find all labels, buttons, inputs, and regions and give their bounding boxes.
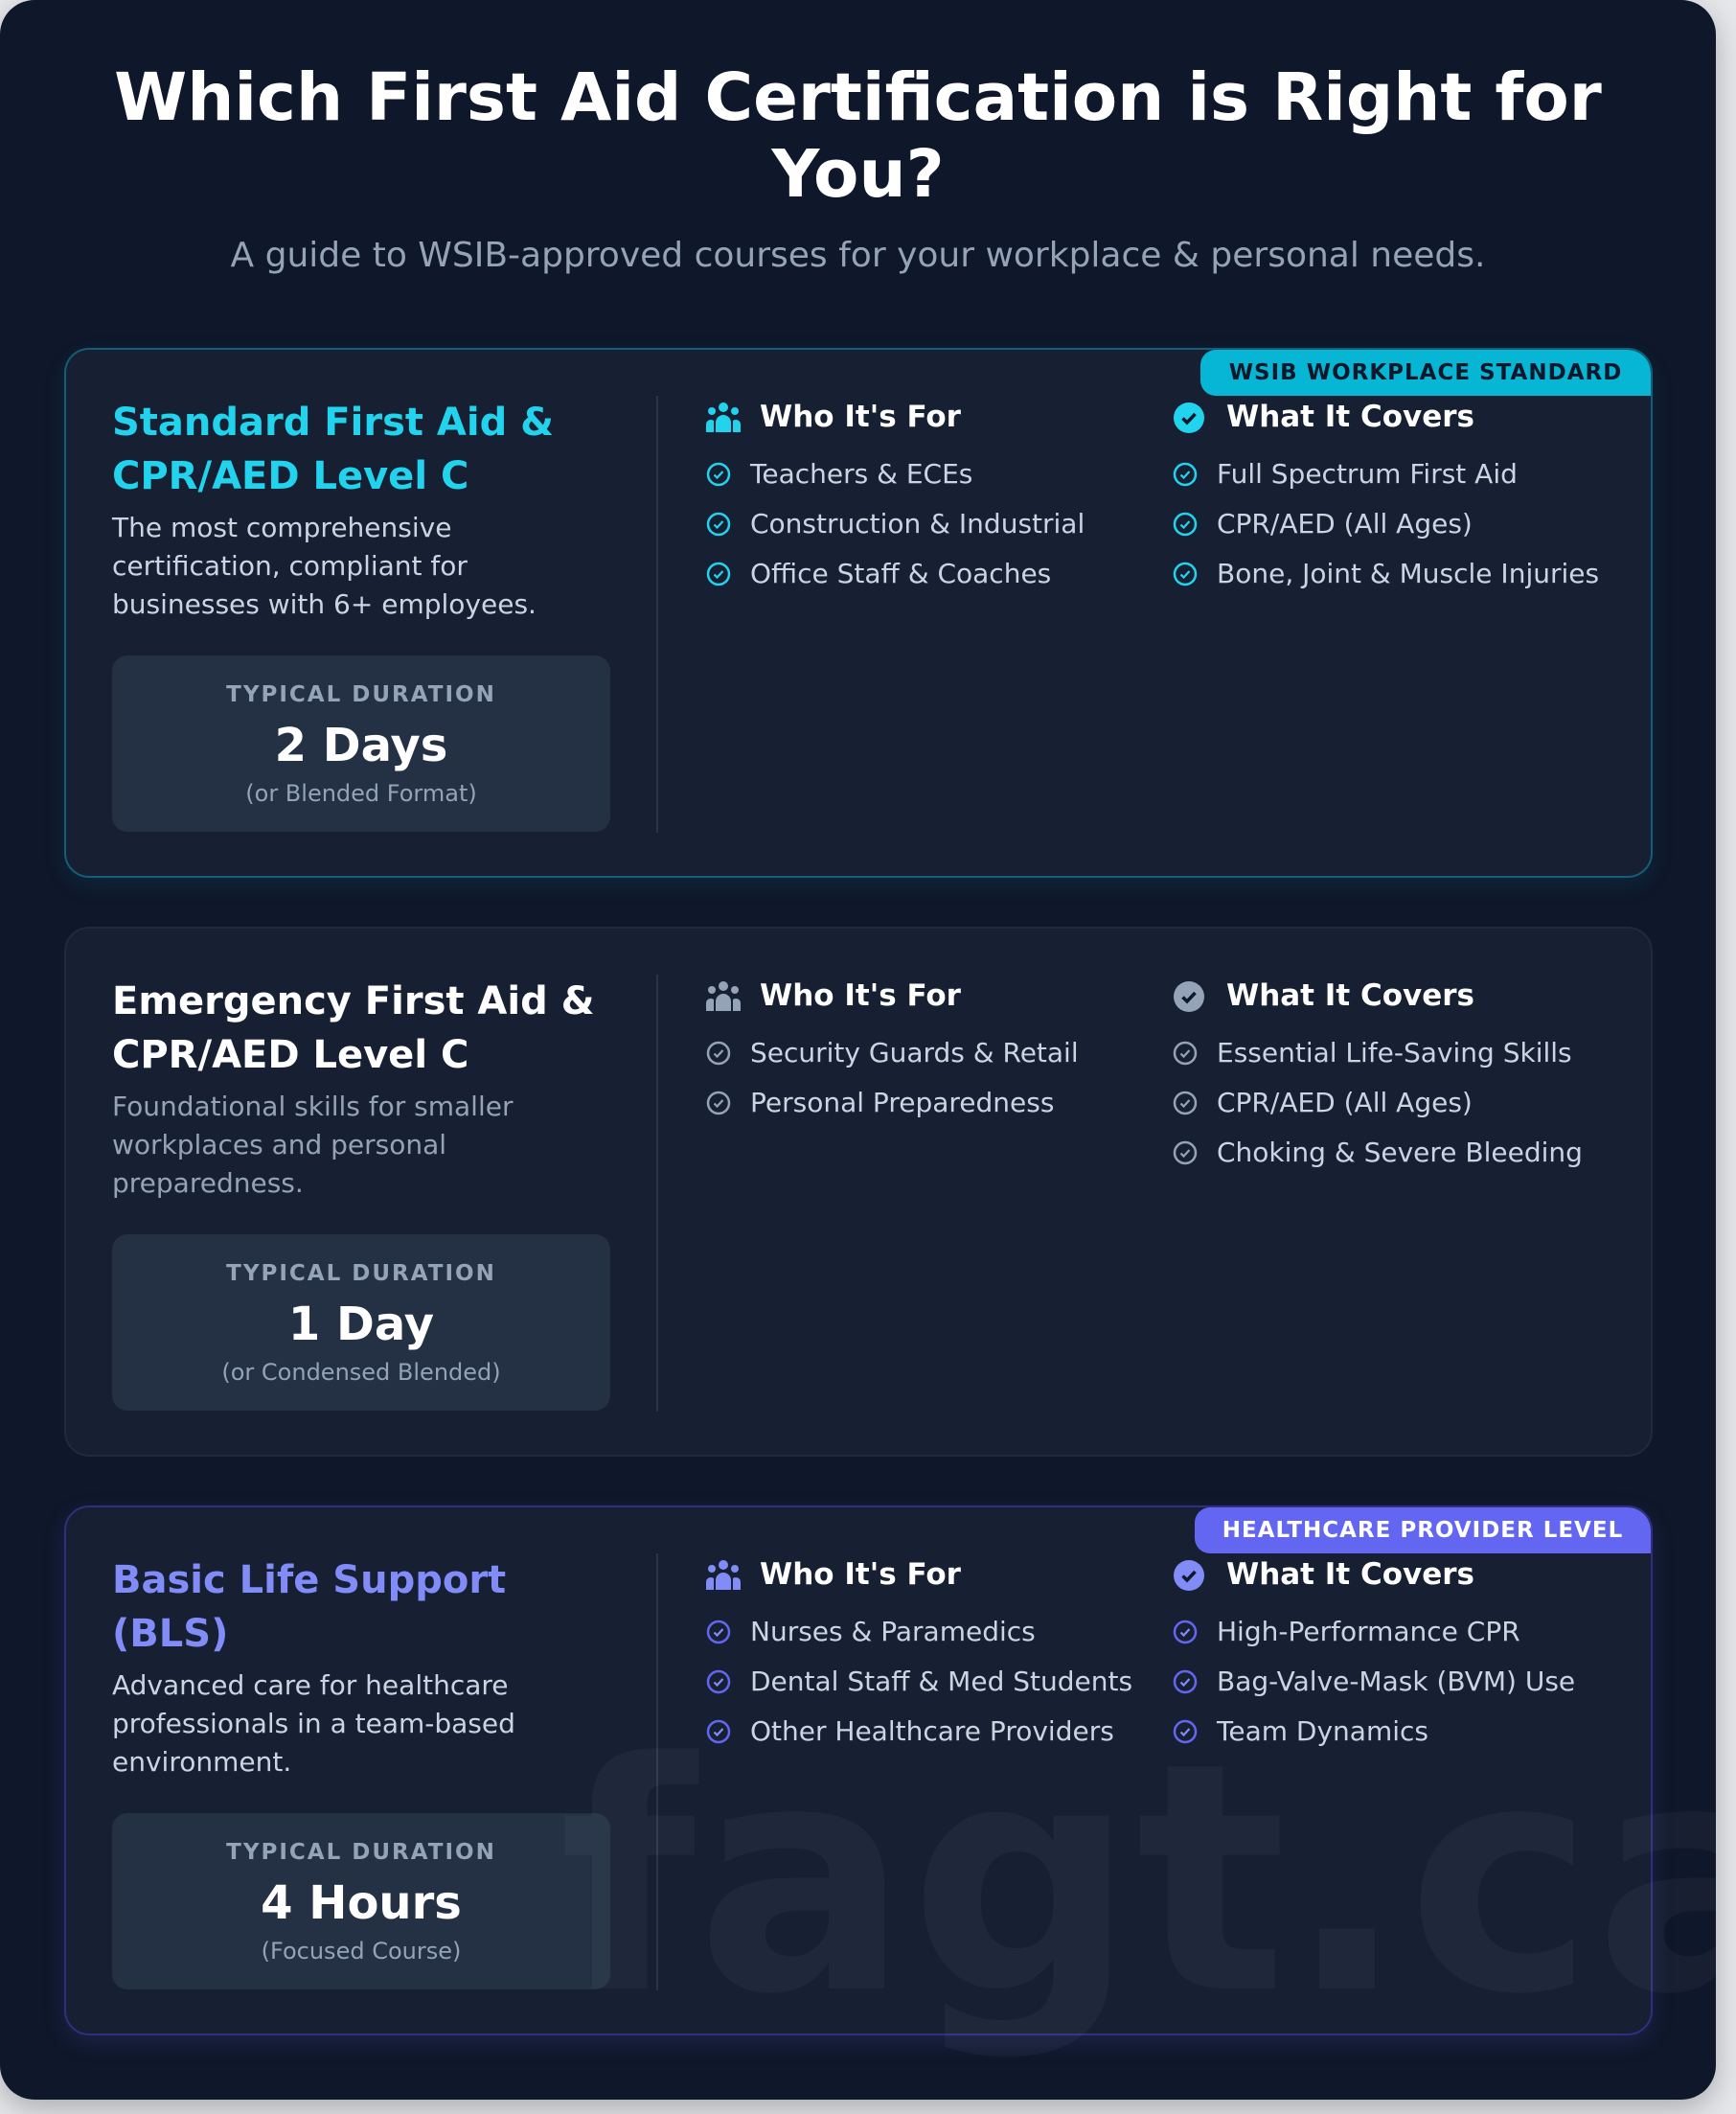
- title: Which First Aid Certification is Right for: [114, 59, 1602, 136]
- title: [114, 59, 1602, 213]
- duration box: (or Blended Format): [245, 780, 477, 807]
- list: who it's for: Security Guards & Retail: [750, 1037, 1079, 1068]
- list: what it covers: Team Dynamics: [1217, 1715, 1428, 1747]
- list: what it covers: Full Spectrum First Aid: [1217, 458, 1518, 490]
- list: who it's for: Who It's For: [760, 1557, 961, 1592]
- list: who it's for: [706, 400, 1085, 589]
- list: who it's for: Other Healthcare Providers: [750, 1715, 1114, 1747]
- heading: emergency first aid: CPR/AED Level C: [112, 1033, 468, 1077]
- panel: basic life support: [64, 1505, 1653, 2035]
- list: what it covers: High-Performance CPR: [1217, 1616, 1520, 1647]
- list: what it covers: CPR/AED (All Ages): [1217, 508, 1473, 540]
- description: The most comprehensive certification, compliant for businesses with 6+ employees.: [112, 512, 537, 620]
- list: what it covers: [1173, 400, 1599, 589]
- duration box: TYPICAL DURATION: [226, 1840, 496, 1865]
- subtitle: A guide to WSIB-approved courses for your workplace & personal needs.: [231, 236, 1485, 275]
- list: what it covers: [1173, 1557, 1575, 1747]
- heading: emergency first aid: [112, 979, 595, 1077]
- heading: bls: [112, 1558, 506, 1656]
- badge: wsib workplace standard: WSIB WORKPLACE STANDARD: [1229, 360, 1622, 385]
- panel: emergency first aid: [64, 927, 1653, 1457]
- description: Foundational skills for smaller workplaces and personal preparedness.: [112, 1091, 513, 1199]
- duration box: [112, 655, 610, 832]
- duration box: (or Condensed Blended): [221, 1359, 501, 1386]
- heading: standard first aid: [112, 401, 554, 498]
- heading: emergency first aid: Emergency First Aid &: [112, 979, 595, 1023]
- list: who it's for: Dental Staff & Med Students: [750, 1666, 1132, 1697]
- duration box: 2 Days: [275, 719, 447, 772]
- list: what it covers: Essential Life-Saving Skills: [1217, 1037, 1572, 1068]
- list: what it covers: Choking & Severe Bleeding: [1217, 1137, 1583, 1168]
- heading: standard first aid: Standard First Aid &: [112, 401, 554, 445]
- list: who it's for: Personal Preparedness: [750, 1087, 1054, 1118]
- list: what it covers: Bag-Valve-Mask (BVM) Use: [1217, 1666, 1575, 1697]
- duration box: TYPICAL DURATION: [226, 682, 496, 707]
- list: what it covers: [1173, 978, 1583, 1168]
- list: who it's for: [706, 1557, 1132, 1747]
- list: what it covers: What It Covers: [1226, 978, 1474, 1013]
- duration box: TYPICAL DURATION: [226, 1261, 496, 1286]
- list: who it's for: Teachers & ECEs: [750, 458, 972, 490]
- heading: standard first aid: CPR/AED Level C: [112, 454, 468, 498]
- badge: healthcare provider level: HEALTHCARE PROVIDER LEVEL: [1222, 1518, 1623, 1543]
- duration box: 1 Day: [288, 1298, 434, 1351]
- list: what it covers: What It Covers: [1226, 1557, 1474, 1592]
- duration box: 4 Hours: [261, 1876, 462, 1930]
- list: what it covers: Bone, Joint & Muscle Injuries: [1217, 558, 1599, 589]
- list: who it's for: Construction & Industrial: [750, 508, 1085, 540]
- duration box: [112, 1813, 610, 1989]
- description: Advanced care for healthcare professionals in a team-based environment.: [112, 1669, 515, 1778]
- heading: bls: (BLS): [112, 1612, 228, 1656]
- duration box: (Focused Course): [262, 1938, 461, 1965]
- badge: wsib workplace standard: [1200, 350, 1651, 396]
- title: You?: [771, 136, 945, 213]
- list: who it's for: Who It's For: [760, 978, 961, 1013]
- list: who it's for: Who It's For: [760, 400, 961, 434]
- heading: bls: Basic Life Support: [112, 1558, 506, 1602]
- list: who it's for: Office Staff & Coaches: [750, 558, 1051, 589]
- list: who it's for: Nurses & Paramedics: [750, 1616, 1036, 1647]
- list: what it covers: What It Covers: [1226, 400, 1474, 434]
- badge: healthcare provider level: [1195, 1507, 1651, 1553]
- list: what it covers: CPR/AED (All Ages): [1217, 1087, 1473, 1118]
- duration box: [112, 1234, 610, 1411]
- list: who it's for: [706, 978, 1079, 1118]
- panel: standard first aid: [64, 348, 1653, 878]
